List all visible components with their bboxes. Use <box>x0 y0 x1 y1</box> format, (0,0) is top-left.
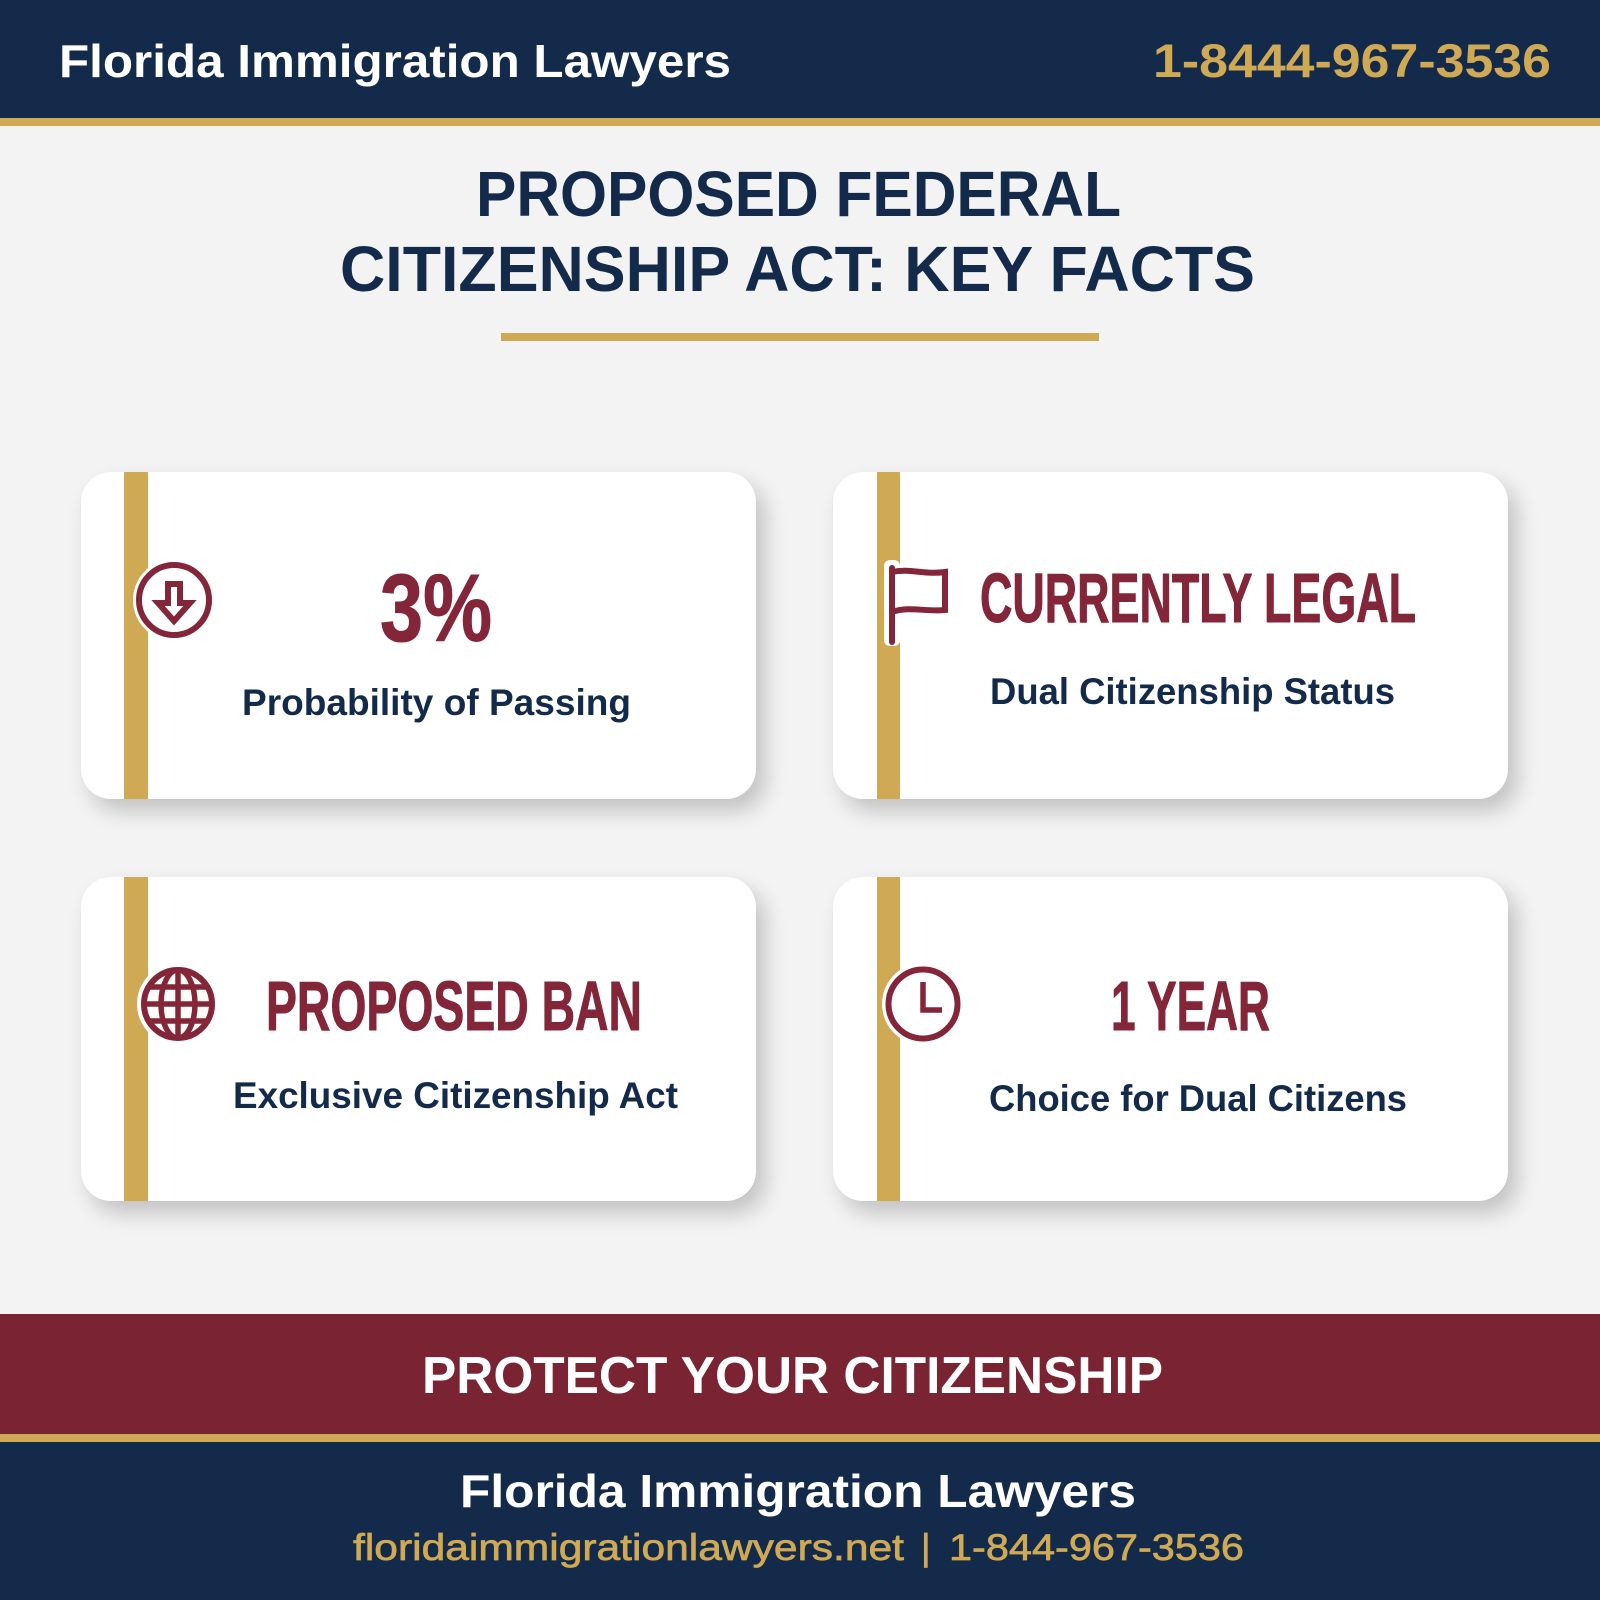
footer band <box>0 1442 1600 1600</box>
header band <box>0 0 1600 126</box>
call to action band <box>0 1314 1600 1442</box>
label: probability of passing: Probability of Passing <box>242 682 631 723</box>
footer website and phone: | <box>921 1527 931 1568</box>
label: exclusive citizenship act: Exclusive Citizenship Act <box>233 1075 678 1116</box>
label: dual citizenship status: Dual Citizenship Status <box>990 671 1395 712</box>
stat: 1 year: 1 YEAR <box>1111 967 1270 1045</box>
footer website and phone: floridaimmigrationlawyers.net <box>353 1527 905 1568</box>
icon: flag <box>884 560 945 646</box>
footer website and phone <box>353 1527 1244 1568</box>
title: PROPOSED FEDERAL <box>476 158 1121 230</box>
icon: clock <box>882 963 964 1045</box>
icon: globe <box>137 963 219 1045</box>
stat: proposed ban: PROPOSED BAN <box>266 967 642 1045</box>
panel: dual citizenship status <box>833 472 1517 811</box>
title underline <box>501 333 1099 341</box>
header phone number: 1-8444-967-3536 <box>1153 34 1551 87</box>
footer website and phone: 1-844-967-3536 <box>949 1527 1244 1568</box>
stat: 3%: 3% <box>380 555 492 662</box>
panel: probability of passing <box>81 472 765 811</box>
icon: down arrow in circle <box>133 559 215 641</box>
panel: choice for dual citizens <box>833 877 1517 1213</box>
title <box>340 158 1255 305</box>
title: CITIZENSHIP ACT: KEY FACTS <box>340 233 1255 305</box>
panel: exclusive citizenship act <box>81 877 765 1213</box>
call to action band: PROTECT YOUR CITIZENSHIP <box>422 1347 1163 1405</box>
header firm name: Florida Immigration Lawyers <box>59 35 731 87</box>
footer firm name: Florida Immigration Lawyers <box>460 1465 1136 1517</box>
label: choice for dual citizens: Choice for Dual Citizens <box>989 1078 1407 1119</box>
